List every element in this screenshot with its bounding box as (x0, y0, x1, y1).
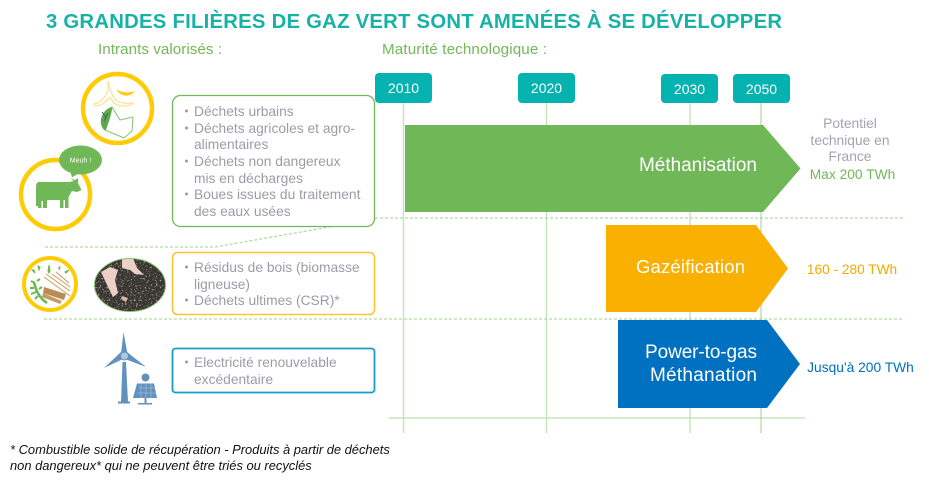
arrow: power-to-gas méthanation: Méthanation (650, 365, 757, 386)
icon: wind turbine and solar panel (104, 332, 157, 404)
year marker: 2050 (733, 74, 790, 103)
title: 3 GRANDES FILIÈRES DE GAZ VERT SONT AMENÉES À SE DÉVELOPPER (46, 10, 782, 33)
potential: méthanisation: Potentiel (823, 116, 877, 131)
panel: intrants méthanisation: Déchets agricoles et agro- (194, 121, 355, 136)
panel: intrants méthanisation: des eaux usées (194, 204, 291, 219)
panel: intrants gazéification: Déchets ultimes (CSR)* (194, 293, 340, 308)
panel: intrants power-to-gas: excédentaire (194, 372, 273, 387)
panel: intrants power-to-gas: Electricité renouvelable (194, 355, 337, 370)
icon: soil in hands photo (94, 258, 166, 312)
potential: méthanisation: Max 200 TWh (810, 167, 895, 182)
arrow: power-to-gas méthanation: Power-to-gas (645, 342, 757, 363)
panel: intrants méthanisation: mis en décharges (194, 171, 303, 186)
potential: gazéification: 160 - 280 TWh (807, 262, 897, 277)
icon: cow with speech bubble (21, 146, 102, 229)
panel: intrants gazéification: Résidus de bois (biomasse (194, 260, 360, 275)
year marker: 2050: 2050 (746, 81, 777, 97)
arrow: power-to-gas méthanation (618, 320, 800, 408)
footnote: non dangereux* qui ne peuvent être triés ou recyclés (10, 458, 312, 473)
arrow: méthanisation (405, 125, 800, 212)
panel: intrants méthanisation: Déchets non dangereux (194, 154, 341, 169)
heading: maturité technologique: Maturité technologique : (382, 41, 547, 58)
icon: cow with speech bubble: Meuh ! (70, 158, 91, 164)
arrow: méthanisation: Méthanisation (639, 155, 757, 176)
panel: intrants méthanisation: Boues issues du traitement (194, 187, 361, 202)
year marker: 2030: 2030 (674, 81, 705, 97)
potential: méthanisation: France (829, 149, 872, 164)
icon: food waste (83, 74, 152, 143)
year marker: 2010 (375, 73, 432, 103)
panel: intrants gazéification: ligneuse) (194, 277, 250, 292)
year marker: 2030 (661, 74, 718, 103)
heading: intrants valorisés: Intrants valorisés : (98, 41, 222, 58)
potential: power-to-gas: Jusqu'à 200 TWh (807, 360, 914, 375)
panel: intrants méthanisation (172, 96, 374, 226)
panel: intrants gazéification (172, 252, 374, 314)
icon: wood biomass (24, 258, 76, 310)
arrow: gazéification (606, 225, 788, 312)
panel: intrants méthanisation: alimentaires (194, 137, 268, 152)
panel: intrants méthanisation: Déchets urbains (194, 104, 294, 119)
footnote: * Combustible solide de récupération - Produits à partir de déchets (10, 442, 390, 457)
potential: méthanisation: technique en (810, 133, 890, 148)
panel: intrants power-to-gas (172, 348, 374, 392)
year marker: 2020: 2020 (531, 80, 562, 96)
year marker: 2010: 2010 (388, 80, 419, 96)
potential: méthanisation (810, 116, 895, 182)
footnote (10, 442, 390, 473)
year marker: 2020 (518, 73, 575, 103)
arrow: gazéification: Gazéification (636, 256, 745, 277)
